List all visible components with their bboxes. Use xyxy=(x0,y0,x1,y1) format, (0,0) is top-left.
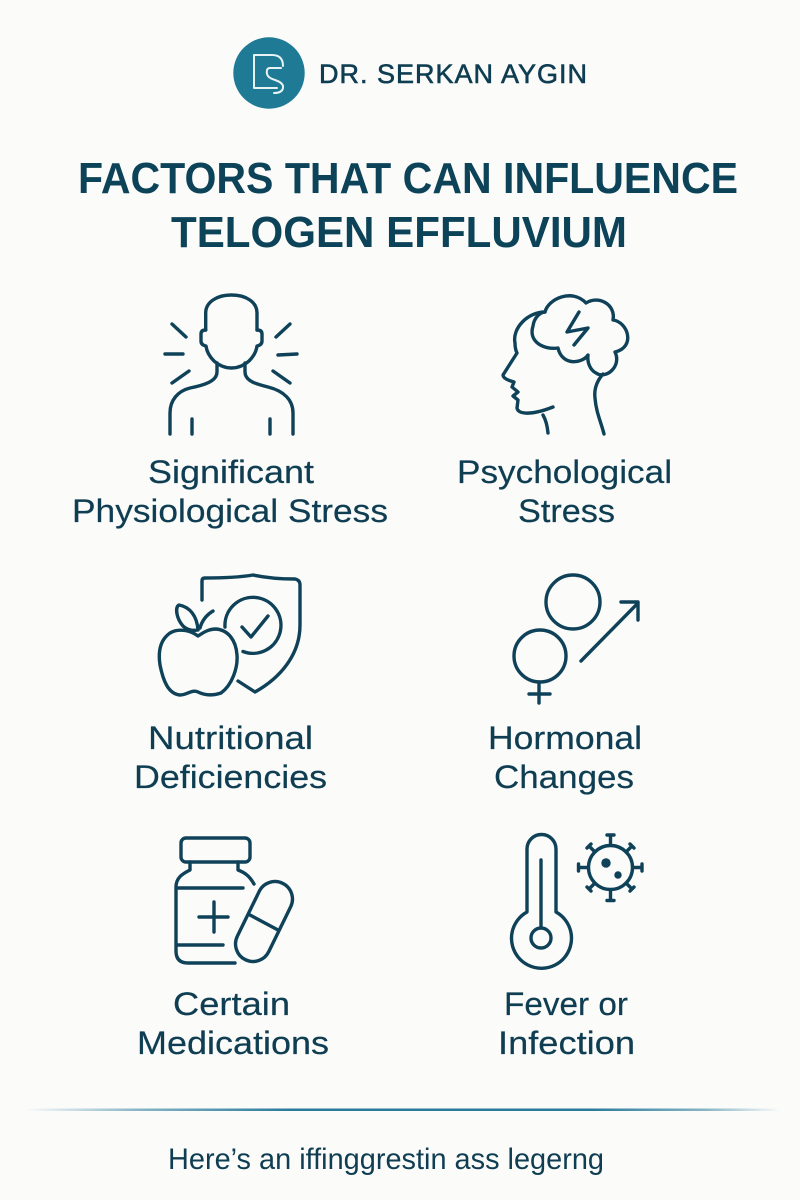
label: Deficiencies xyxy=(134,759,327,795)
label: Changes xyxy=(494,759,634,795)
divider line xyxy=(25,1108,780,1111)
label: Significant xyxy=(148,454,314,490)
label: Physiological Stress xyxy=(72,493,388,529)
icon: head with brain and lightning bolt xyxy=(503,296,628,434)
icon: pill bottle and capsule xyxy=(176,838,298,967)
panel: psychological stress xyxy=(457,296,672,529)
icon: thermometer and virus xyxy=(512,834,642,968)
label xyxy=(498,986,635,1061)
panel: hormonal changes xyxy=(488,575,642,795)
icon: gender symbols with arrow xyxy=(514,575,638,703)
icon: apple and shield with check xyxy=(159,575,300,695)
panel: fever or infection xyxy=(498,834,642,1061)
header: logo and name xyxy=(233,37,587,109)
panel: certain medications xyxy=(137,838,329,1061)
title xyxy=(78,154,738,257)
icon: logo badge xyxy=(233,37,305,109)
label xyxy=(457,454,672,529)
label: Medications xyxy=(137,1025,329,1061)
label: Hormonal xyxy=(488,720,642,756)
label xyxy=(134,720,327,795)
brand name: DR. SERKAN AYGIN xyxy=(319,59,587,89)
title: FACTORS THAT CAN INFLUENCE xyxy=(78,154,738,203)
label xyxy=(137,986,329,1061)
panel: nutritional deficiencies xyxy=(134,575,327,795)
title: TELOGEN EFFLUVIUM xyxy=(171,208,627,257)
label: Certain xyxy=(173,986,290,1022)
icon: person with stress rays xyxy=(165,295,297,434)
label: Stress xyxy=(518,493,615,529)
panel: significant physiological stress xyxy=(72,295,388,529)
label xyxy=(72,454,388,529)
label: Nutritional xyxy=(148,720,313,756)
label xyxy=(488,720,642,795)
label: Infection xyxy=(498,1025,635,1061)
label: Fever or xyxy=(504,986,628,1022)
label: Psychological xyxy=(457,454,672,490)
footer text: Here’s an iffinggrestin ass legerng xyxy=(168,1143,604,1176)
